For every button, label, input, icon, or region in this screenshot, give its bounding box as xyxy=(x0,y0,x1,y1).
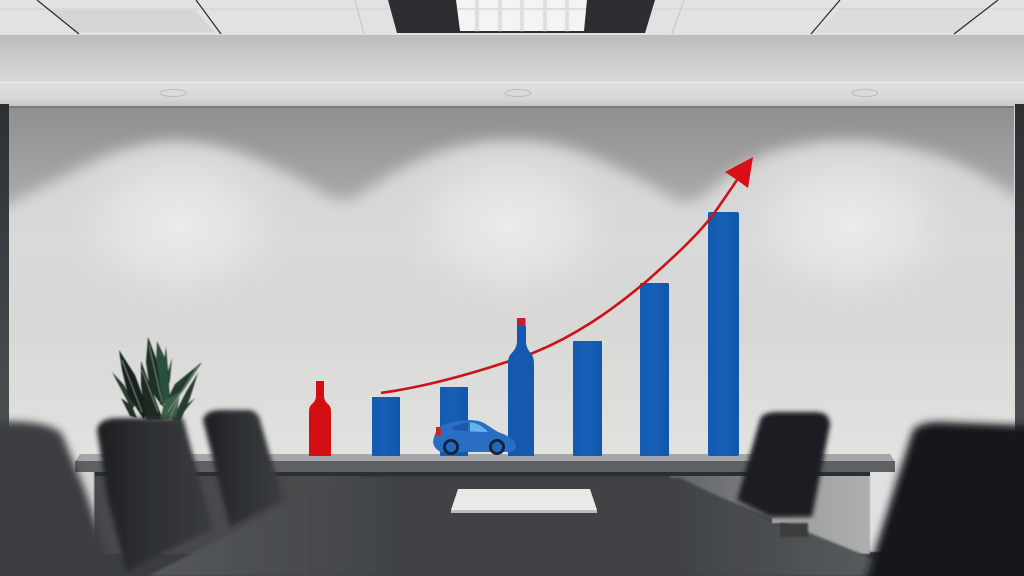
chart: bar 5 xyxy=(640,283,669,456)
chair: right xyxy=(737,412,830,537)
chart: blue bottle xyxy=(508,318,534,456)
chair: third from left xyxy=(203,410,283,527)
toy car xyxy=(433,420,516,455)
conference table xyxy=(148,478,900,576)
chart: bar 6 xyxy=(708,212,739,456)
credenza below shelf xyxy=(78,470,890,554)
plant xyxy=(112,337,202,422)
chart: bar 1 xyxy=(372,397,400,456)
ceiling light fixture xyxy=(388,0,655,33)
chair: far right xyxy=(860,422,1024,576)
paper on table xyxy=(451,489,597,513)
chart: red curve with arrow xyxy=(381,157,753,393)
chair: far left xyxy=(0,421,122,576)
arrowhead xyxy=(725,157,753,188)
chair: second from left xyxy=(97,418,213,572)
chart: red bottle xyxy=(309,381,331,456)
wall with arches of light xyxy=(0,106,1024,470)
dark side columns xyxy=(0,104,1024,434)
floor beneath furniture xyxy=(0,540,1024,576)
chart: bar 2 xyxy=(440,387,468,456)
chart: bar 4 xyxy=(573,341,602,456)
ceiling xyxy=(0,0,1024,37)
shelf xyxy=(75,454,895,476)
soffit beam xyxy=(0,35,1024,107)
